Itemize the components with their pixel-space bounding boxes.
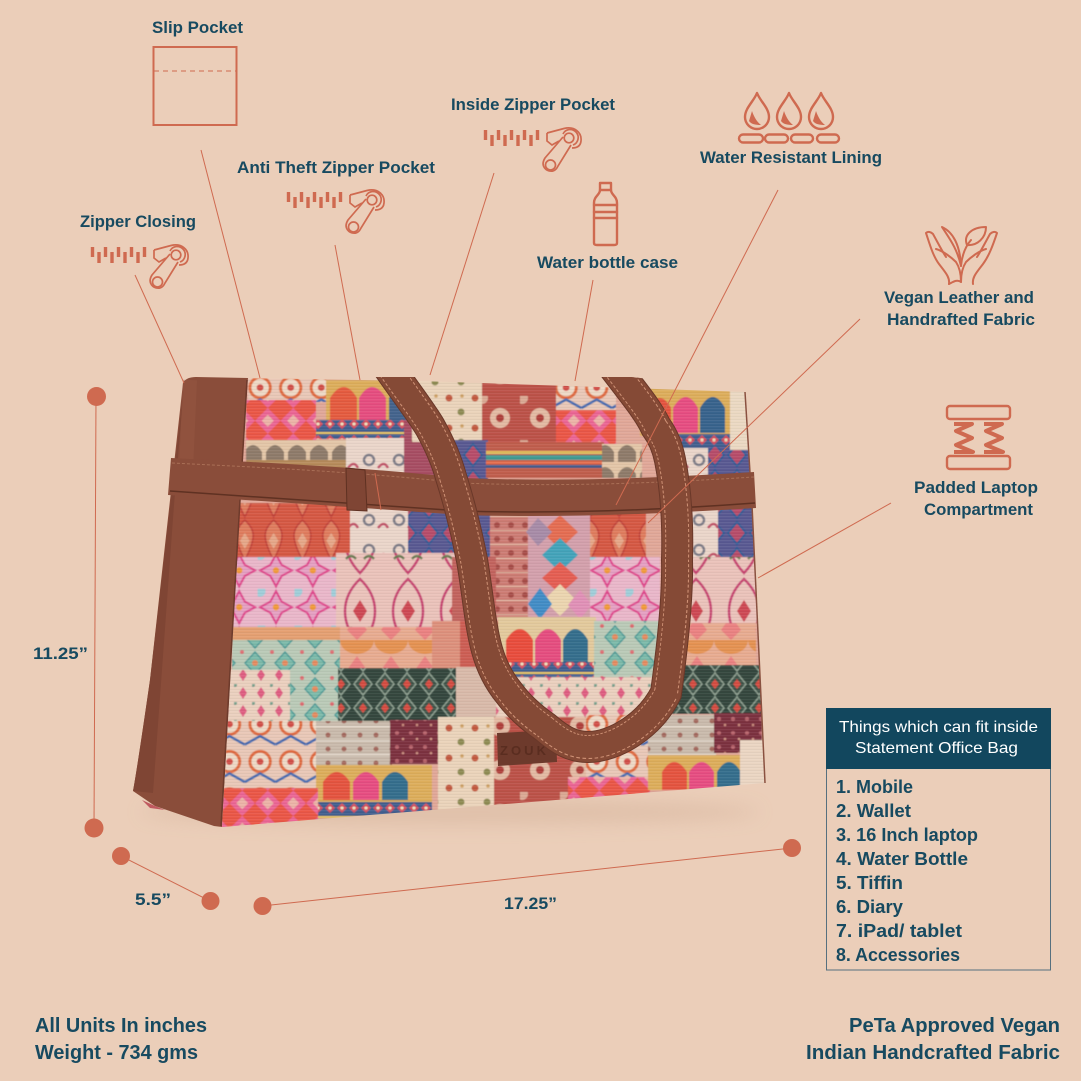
- footer: certifications: PeTa Approved Vegan: [849, 1015, 1060, 1037]
- label: Anti Theft Zipper Pocket: Anti Theft Zipper Pocket: [237, 158, 435, 177]
- dimension: height 11.25: 11.25”: [33, 644, 88, 663]
- icon: padded spring: [947, 406, 1010, 469]
- label: Vegan Leather and Handrafted Fabric: Vegan Leather and: [884, 288, 1034, 307]
- gusset stitch: [221, 380, 247, 826]
- shoulder strap: [378, 352, 677, 747]
- list of items: 5. Tiffin: [836, 873, 903, 893]
- list of items: 1. Mobile: [836, 777, 913, 797]
- list of items: 8. Accessories: [836, 945, 960, 965]
- dimension: depth 5.5: [112, 847, 220, 910]
- label: Zipper Closing: Zipper Closing: [80, 212, 196, 231]
- icon: zipper closing: [92, 245, 188, 288]
- label: Padded Laptop Compartment: Compartment: [924, 500, 1033, 519]
- dimension: depth 5.5: 5.5”: [135, 890, 171, 909]
- panel header: Things which can fit inside: [839, 719, 1038, 736]
- list of items: 7. iPad/ tablet: [836, 921, 962, 941]
- icon: water drops: [739, 93, 839, 142]
- footer: units and weight: Weight - 734 gms: [35, 1042, 198, 1064]
- label: Padded Laptop Compartment: [914, 478, 1038, 519]
- label: Water bottle case: Water bottle case: [537, 253, 678, 272]
- icon: water bottle: [594, 183, 617, 245]
- leather label: [497, 730, 557, 766]
- footer: certifications: Indian Handcrafted Fabric: [806, 1042, 1060, 1064]
- leather label: ZOUK: [500, 743, 547, 758]
- label: Inside Zipper Pocket: Inside Zipper Pocket: [451, 95, 615, 114]
- dimension: height 11.25: [33, 387, 106, 838]
- panel header: [826, 708, 1051, 769]
- illustration: bag: [133, 377, 766, 827]
- label: Slip Pocket: Slip Pocket: [152, 18, 243, 37]
- list of items: [836, 777, 978, 965]
- list of items: 3. 16 Inch laptop: [836, 825, 978, 845]
- panel: things which can fit inside: [826, 708, 1051, 970]
- icon: hands and leaves: [926, 227, 997, 284]
- icon: zipper, inside pocket: [486, 128, 581, 171]
- footer: certifications: [806, 1015, 1060, 1064]
- label: Water Resistant Lining: Water Resistant Lining: [700, 148, 882, 167]
- list of items: 4. Water Bottle: [836, 849, 968, 869]
- belt across bag: [168, 458, 756, 516]
- label: Padded Laptop Compartment: Padded Laptop: [914, 478, 1038, 497]
- dimension: width 17.25: 17.25”: [504, 894, 557, 913]
- fabric: patchwork front panel: [222, 378, 764, 827]
- footer: units and weight: [35, 1015, 207, 1064]
- fabric right edge trim: [745, 392, 765, 783]
- leader lines: [135, 150, 891, 578]
- icon: slip pocket: [154, 47, 236, 125]
- label: Vegan Leather and Handrafted Fabric: [884, 288, 1035, 329]
- bag shadow: [140, 799, 760, 825]
- dimension: width 17.25: [254, 839, 801, 915]
- panel header: Statement Office Bag: [855, 740, 1018, 757]
- list of items: 6. Diary: [836, 897, 903, 917]
- gusset: left leather side: [133, 377, 248, 827]
- icon: zipper, anti theft pocket: [288, 190, 384, 233]
- footer: units and weight: All Units In inches: [35, 1015, 207, 1037]
- label: Vegan Leather and Handrafted Fabric: Handrafted Fabric: [887, 310, 1035, 329]
- list of items: 2. Wallet: [836, 801, 911, 821]
